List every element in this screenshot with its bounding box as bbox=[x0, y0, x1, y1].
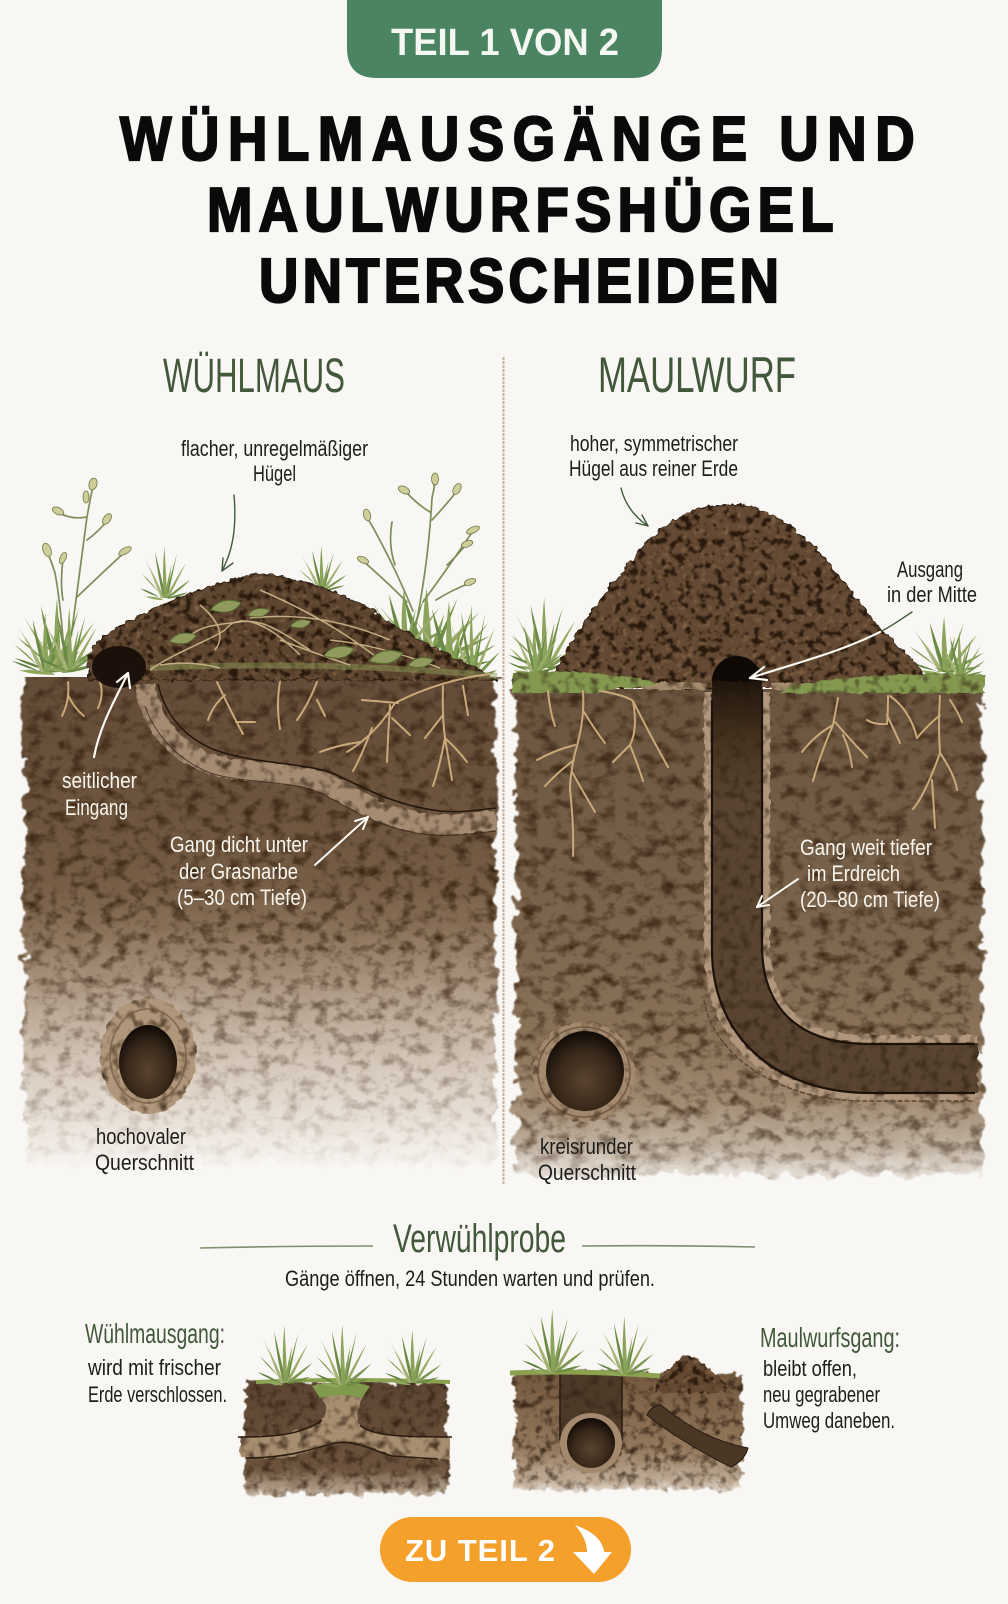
label: flacher Hügel bbox=[181, 436, 368, 486]
label: seitlicher Eingang: seitlicher bbox=[62, 768, 137, 793]
soil cross-section bbox=[516, 670, 982, 1175]
tunnel: Gang weit tiefer bbox=[704, 656, 978, 1101]
heading: Verwühlprobe: Verwühlprobe bbox=[393, 1217, 566, 1261]
grass strip bbox=[512, 672, 985, 693]
label: Gang weit tiefer bbox=[800, 835, 940, 912]
label: Gang dicht unter der Grasnarbe: der Grasnarbe bbox=[179, 859, 298, 884]
button: Zu Teil 2 bbox=[380, 1517, 631, 1582]
soil cross-section bbox=[24, 650, 496, 1165]
grass tufts and stems right bbox=[297, 473, 500, 681]
label: Gang dicht unter der Grasnarbe bbox=[170, 832, 308, 910]
cross-section: hochoval bbox=[100, 998, 196, 1114]
label: Ausgang in der Mitte bbox=[887, 557, 977, 607]
hole: seitlicher Eingang bbox=[92, 646, 146, 688]
title: UNTERSCHEIDEN bbox=[259, 247, 779, 316]
label: hoher Hügel: hoher, symmetrischer bbox=[570, 431, 738, 456]
label: kreisrunder Querschnitt: kreisrunder bbox=[540, 1134, 633, 1159]
subtitle: Gänge öffnen, 24 Stunden warten und prüfen. bbox=[285, 1266, 655, 1291]
text: Maulwurfsgang: bleibt offen, bbox=[763, 1356, 857, 1381]
icon: arrow down bbox=[573, 1525, 612, 1574]
text: Maulwurfsgang: neu gegrabener bbox=[763, 1382, 880, 1407]
text: Maulwurfsgang: Maulwurfsgang: bbox=[760, 1322, 900, 1353]
text: Wühlmausgang: Wühlmausgang: bbox=[85, 1318, 225, 1349]
roots right bbox=[537, 691, 962, 856]
label: Gang weit tiefer: im Erdreich bbox=[807, 861, 900, 886]
label: hochovaler Querschnitt: Querschnitt bbox=[95, 1150, 194, 1175]
arrow: zum Hügel bbox=[621, 488, 648, 526]
arrow: Ausgang bbox=[750, 612, 912, 680]
arrow: zum Hügel bbox=[222, 495, 235, 571]
roots left bbox=[62, 674, 490, 786]
label: Gang weit tiefer: (20–80 cm Tiefe) bbox=[800, 887, 940, 912]
label: hochovaler Querschnitt bbox=[95, 1124, 194, 1175]
mound: symmetrischer Hügel bbox=[548, 505, 930, 688]
label: seitlicher Eingang bbox=[62, 768, 137, 820]
arrow: Gang bbox=[315, 817, 368, 865]
label: flacher Hügel: Hügel bbox=[253, 461, 296, 486]
illustration: offener Gang mit Umweg bbox=[510, 1309, 748, 1490]
title: WÜHLMAUSGÄNGE UND bbox=[120, 105, 915, 174]
panel: Wühlmaus bbox=[12, 350, 500, 1175]
label: hoher Hügel: Hügel aus reiner Erde bbox=[569, 456, 738, 481]
banner: Teil 1 von 2: TEIL 1 VON 2 bbox=[391, 22, 619, 64]
section: Verwühlprobe bbox=[85, 1217, 900, 1495]
grass tufts bbox=[507, 598, 985, 678]
heading: Maulwurf: MAULWURF bbox=[598, 347, 796, 403]
label: hochovaler Querschnitt: hochovaler bbox=[96, 1124, 186, 1149]
banner: Teil 1 von 2 bbox=[347, 0, 662, 78]
label: kreisrunder Querschnitt: Querschnitt bbox=[538, 1160, 636, 1185]
cross-section: kreisrund bbox=[533, 1022, 635, 1122]
label: seitlicher Eingang: Eingang bbox=[65, 795, 128, 820]
title: MAULWURFSHÜGEL bbox=[207, 176, 834, 245]
label: Gang weit tiefer: Gang weit tiefer bbox=[800, 835, 932, 860]
label: flacher Hügel: flacher, unregelmäßiger bbox=[181, 436, 368, 461]
arrow: Gang bbox=[757, 879, 798, 907]
label: Ausgang in der Mitte: Ausgang bbox=[897, 557, 963, 582]
text: Wühlmausgang bbox=[85, 1318, 227, 1407]
button: Zu Teil 2: ZU TEIL 2 bbox=[405, 1533, 555, 1568]
label: Ausgang in der Mitte: in der Mitte bbox=[887, 582, 977, 607]
text: Maulwurfsgang: Umweg daneben. bbox=[763, 1408, 895, 1433]
title bbox=[120, 105, 915, 316]
label: hoher Hügel bbox=[569, 431, 738, 481]
arrow: seitlicher Eingang bbox=[94, 673, 130, 757]
tunnel: Gang dicht unter der Grasnarbe bbox=[145, 684, 496, 836]
grass tufts and stems left bbox=[12, 477, 190, 675]
label: kreisrunder Querschnitt bbox=[538, 1134, 636, 1185]
text: Wühlmausgang: wird mit frischer bbox=[87, 1355, 221, 1380]
text: Maulwurfsgang bbox=[760, 1322, 900, 1433]
heading: Wühlmaus: WÜHLMAUS bbox=[163, 350, 345, 403]
mound: flacher Hügel bbox=[88, 573, 497, 680]
illustration: verschlossener Gang bbox=[238, 1324, 452, 1495]
text: Wühlmausgang: Erde verschlossen. bbox=[88, 1382, 227, 1407]
label: Gang dicht unter der Grasnarbe: (5–30 cm Tiefe) bbox=[177, 885, 307, 910]
label: Gang dicht unter der Grasnarbe: Gang dicht unter bbox=[170, 832, 308, 857]
panel: Maulwurf bbox=[507, 347, 985, 1185]
